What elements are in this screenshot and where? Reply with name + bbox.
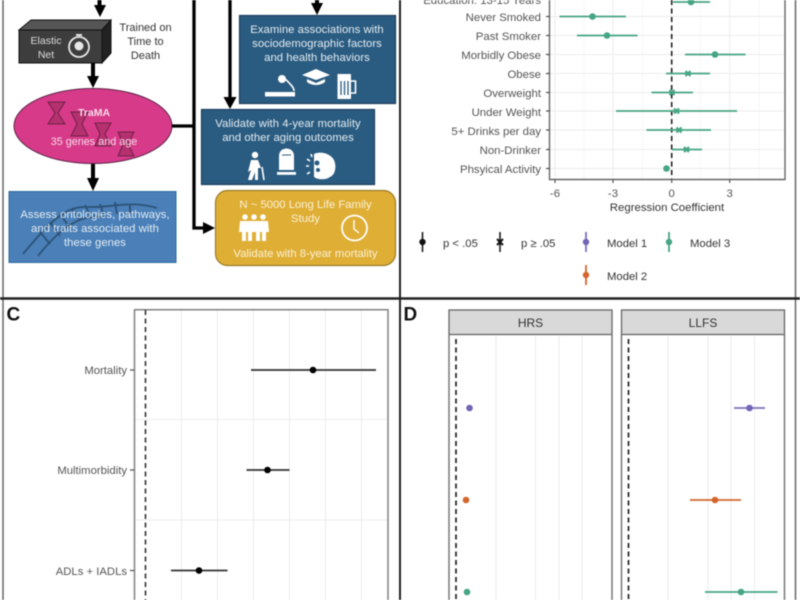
estimates	[463, 405, 473, 595]
legend: p < .05	[419, 232, 478, 252]
arrow: to 4-year validation	[224, 0, 236, 109]
chart: HRS facet	[449, 310, 612, 600]
panel: assess ontologies: Assess ontologies, pathways,	[20, 209, 170, 221]
arrow: into elastic net	[94, 0, 106, 17]
icon: brain	[306, 153, 335, 179]
icon: beer mug	[338, 74, 356, 99]
text: trained on time to death: Time to	[127, 36, 164, 48]
arrow: to TraMA	[87, 63, 99, 88]
row labels: Under Weight	[472, 107, 542, 119]
estimates	[690, 405, 778, 595]
chart: LLFS facet	[622, 310, 784, 600]
tick marks	[546, 16, 730, 183]
panel label: D: D	[404, 304, 417, 326]
panel: examine associations: Examine associations with	[250, 24, 384, 36]
panel: validate 4-year: and other aging outcomes	[222, 132, 354, 144]
arrow: to associations	[311, 0, 323, 15]
icon: elastic net box	[19, 20, 111, 63]
row labels: Non-Drinker	[480, 145, 541, 157]
legend	[419, 232, 730, 285]
panel: examine associations	[240, 16, 396, 104]
estimates	[560, 0, 746, 172]
panel: assess ontologies	[9, 192, 176, 262]
panel: validate 4-year: Validate with 4-year mortality	[215, 118, 361, 130]
row labels: Overweight	[483, 88, 542, 100]
facet header: LLFS	[689, 316, 717, 330]
legend: model 2	[583, 265, 647, 285]
icon: family	[239, 214, 269, 241]
x axis labels: 0	[669, 188, 675, 200]
legend: p >= .05	[497, 232, 555, 252]
legend: model 3	[666, 232, 730, 252]
grid lines	[550, 0, 785, 179]
x axis labels: -6	[550, 188, 560, 200]
row labels: Multimorbidity	[57, 465, 127, 477]
row labels	[423, 0, 542, 176]
legend: model 1: Model 1	[607, 238, 647, 250]
TraMA ellipse: 35 genes and age	[51, 136, 137, 148]
row labels: Mortality	[84, 365, 127, 377]
chart: regression coefficients (B)	[423, 0, 785, 214]
facet header	[622, 310, 784, 334]
icon: cigarette	[265, 75, 295, 96]
legend: model 2: Model 2	[607, 271, 647, 283]
plot frame	[134, 310, 388, 600]
panel: assess ontologies: and traits associated with	[31, 223, 159, 235]
legend: model 3: Model 3	[690, 238, 730, 250]
row labels: Never Smoked	[466, 12, 541, 24]
icon: elastic net box: Elastic	[31, 35, 61, 47]
icon: graduation cap	[302, 69, 330, 85]
arrow: TraMA to validation	[172, 0, 215, 234]
row labels: Morbidly Obese	[461, 50, 541, 62]
plot frame	[550, 0, 785, 180]
icon: gravestone	[277, 148, 296, 175]
text: trained on time to death: Trained on	[119, 22, 172, 34]
row labels: Past Smoker	[476, 31, 541, 43]
panel: assess ontologies: these genes	[64, 237, 126, 249]
icon: elastic net box: Net	[38, 49, 54, 61]
estimates	[171, 367, 376, 574]
row labels: Obese	[507, 69, 541, 81]
legend: model 1	[583, 232, 647, 252]
panel: workflow diagram	[9, 0, 396, 266]
zero reference line	[671, 0, 673, 179]
TraMA ellipse	[14, 88, 172, 164]
row labels: Phsyical Activity	[460, 164, 541, 176]
row labels: 5+ Drinks per day	[451, 126, 541, 138]
icon: elder walking	[248, 152, 264, 180]
zero reference line	[144, 310, 146, 600]
grid lines	[135, 310, 388, 600]
arrow: to ontologies	[87, 164, 99, 191]
icon: clock	[342, 216, 367, 240]
text: trained on time to death: Death	[131, 50, 160, 62]
facet header: HRS	[518, 316, 543, 330]
chart: aging outcomes (C)	[56, 310, 388, 600]
x axis labels: 3	[727, 188, 733, 200]
text: trained on time to death	[119, 22, 172, 62]
x axis labels: -3	[608, 188, 618, 200]
panel: validate 4-year	[202, 110, 374, 184]
x axis title: Regression Coefficient	[610, 202, 725, 214]
panel label: C: C	[6, 304, 20, 326]
legend: p >= .05: p ≥ .05	[521, 238, 555, 250]
panel: LLFS validation	[216, 190, 396, 266]
panel: LLFS validation: Validate with 8-year mortality	[233, 248, 378, 260]
panel: LLFS validation: Study	[291, 213, 320, 225]
TraMA ellipse: TraMA	[78, 107, 110, 119]
row labels: ADLs + IADLs	[56, 566, 127, 578]
legend: p < .05: p < .05	[443, 238, 478, 250]
panel: examine associations: and health behaviors	[264, 52, 370, 64]
row labels	[56, 365, 127, 578]
panel: examine associations: sociodemographic factors	[252, 38, 382, 50]
panel: LLFS validation: N ~ 5000 Long Life Family	[239, 199, 372, 211]
x axis labels	[550, 188, 733, 200]
facet header	[449, 310, 612, 334]
